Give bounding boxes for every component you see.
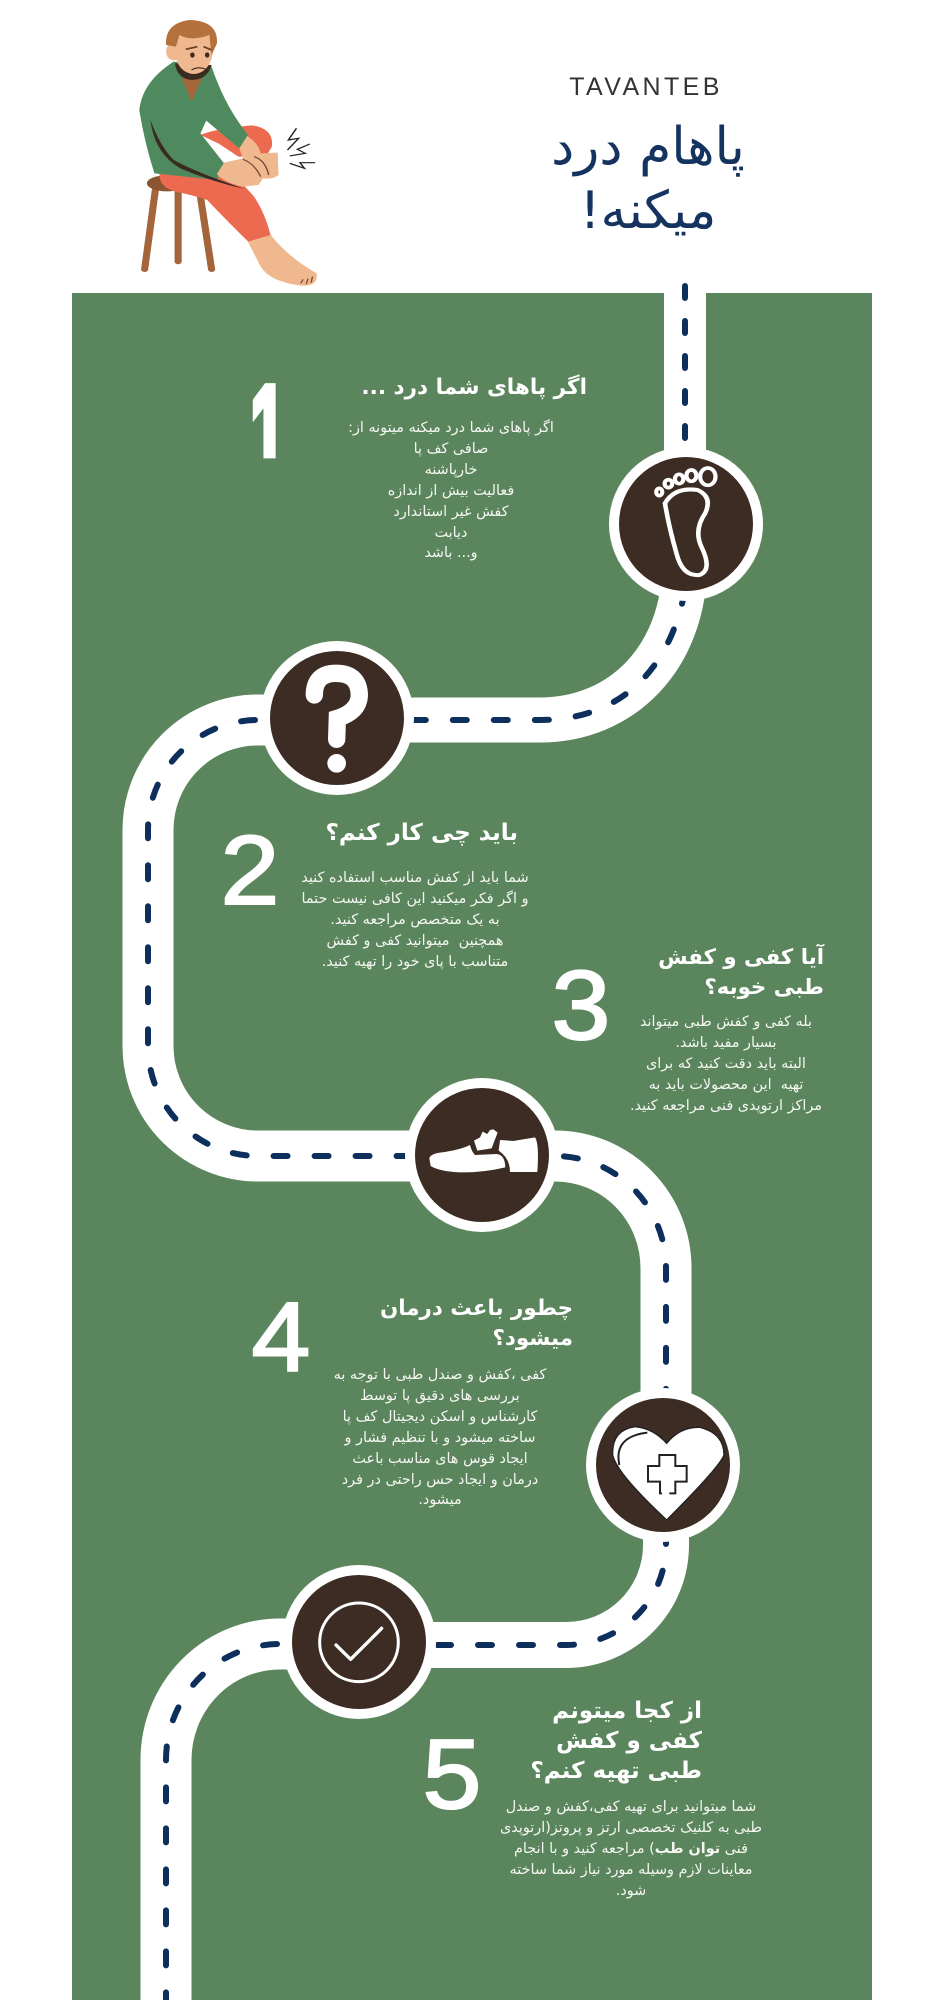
brand name: TAVANTEB	[569, 73, 723, 101]
step 4 text: ساخته میشود و با تنظیم فشار و	[344, 1430, 536, 1446]
step 5 heading: طبی تهیه کنم؟	[530, 1758, 702, 1784]
step 4 text	[334, 1367, 546, 1508]
jacket	[139, 62, 248, 180]
green panel	[72, 293, 872, 2000]
pain lightning marks	[287, 128, 315, 168]
step 3 text: مراکز ارتوپدی فنی مراجعه کنید.	[630, 1098, 822, 1114]
step 1 text: دیابت	[435, 525, 467, 541]
foot	[247, 235, 317, 286]
step 5 text: شما میتوانید برای تهیه کفی،کفش و صندل	[506, 1799, 756, 1815]
title	[551, 117, 745, 241]
step 1 text	[348, 419, 554, 561]
step 3 text	[630, 1014, 822, 1114]
step 1 text: کفش غیر استاندارد	[393, 504, 509, 520]
step 5 text: شود.	[616, 1883, 646, 1899]
step 5 text: طبی به کلنیک تخصصی ارتز و پروتز(ارتوپدی	[500, 1820, 762, 1836]
step 1 number: 1	[250, 357, 286, 508]
step 4 text: ایجاد قوس های مناسب باعث	[352, 1451, 528, 1467]
step 4 text: میشود.	[418, 1492, 462, 1508]
step 3 number: 3	[552, 950, 610, 1060]
step 4 text: درمان و ایجاد حس راحتی در فرد	[342, 1472, 538, 1488]
step 1 text: فعالیت بیش از اندازه	[388, 483, 514, 499]
step 3 heading: آیا کفی و کفش	[658, 945, 824, 970]
shirt	[182, 78, 202, 102]
step 5 heading	[530, 1698, 702, 1784]
illustration: man holding his painful foot on a stool	[139, 20, 317, 286]
hands and toes	[217, 136, 279, 187]
step 5 text	[500, 1799, 762, 1899]
step 1 text: و... باشد	[424, 545, 478, 561]
step 1 heading: اگر پاهای شما درد ...	[361, 375, 587, 400]
icon: shoe	[405, 1078, 559, 1232]
stool	[145, 175, 212, 269]
step 4 text: کارشناس و اسکن دیجیتال کف پا	[343, 1409, 537, 1425]
icon: question mark	[260, 641, 414, 795]
title: پاهام درد	[551, 117, 745, 177]
step 2 text	[301, 870, 529, 970]
road: navy dashed centre line	[148, 286, 685, 2000]
step 1 text: خارپاشنه	[425, 462, 477, 478]
icon: check mark	[282, 1565, 436, 1719]
step 2 heading: باید چی کار کنم؟	[326, 820, 518, 846]
step 1 text: صافی کف پا	[414, 441, 488, 457]
icon: heart with medical cross	[586, 1388, 740, 1542]
step 4 text: کفی ،کفش و صندل طبی با توجه به	[334, 1367, 546, 1383]
step 3 heading: طبی خوبه؟	[704, 975, 824, 1000]
step 2 number: 2	[221, 815, 279, 925]
step 3 text: بله کفی و کفش طبی میتواند	[640, 1014, 812, 1030]
step 2 text: همچنین میتوانید کفی و کفش	[326, 933, 504, 949]
step 5 text: فنی توان طب) مراجعه کنید و با انجام	[514, 1841, 748, 1857]
step 4 text: بررسی های دقیق پا توسط	[360, 1388, 520, 1404]
step 1 text: اگر پاهای شما درد میکنه میتونه از:	[348, 420, 554, 436]
trousers	[159, 168, 271, 242]
road: white path	[148, 275, 685, 2000]
title: میکنه!	[580, 181, 716, 241]
step 2 text: متناسب با پای خود را تهیه کنید.	[322, 954, 508, 970]
step 5 heading: کفی و کفش	[556, 1728, 702, 1754]
neck and head	[166, 20, 217, 80]
step 2 text: شما باید از کفش مناسب استفاده کنید	[301, 870, 529, 886]
step 5 number: 5	[423, 1719, 481, 1829]
step 3 heading	[658, 944, 824, 1000]
raised knee	[200, 125, 272, 157]
step 4 heading: چطور باعث درمان	[380, 1296, 573, 1321]
step 5 heading: از کجا میتونم	[552, 1698, 702, 1724]
step 4 heading: میشود؟	[492, 1326, 573, 1351]
step 4 heading	[380, 1296, 573, 1351]
icon: foot	[609, 447, 763, 601]
step 3 text: تهیه این محصولات باید به	[649, 1077, 803, 1093]
jacket lining	[150, 120, 245, 189]
step 3 text: البته باید دقت کنید که برای	[646, 1056, 806, 1072]
step 2 text: و اگر فکر میکنید این کافی نیست حتما	[301, 891, 529, 907]
step 2 text: به یک متخصص مراجعه کنید.	[330, 912, 500, 928]
step 3 text: بسیار مفید باشد.	[675, 1035, 777, 1051]
step 5 text: معاینات لازم وسیله مورد نیاز شما ساخته	[510, 1862, 752, 1878]
step 4 number: 4	[252, 1282, 310, 1392]
